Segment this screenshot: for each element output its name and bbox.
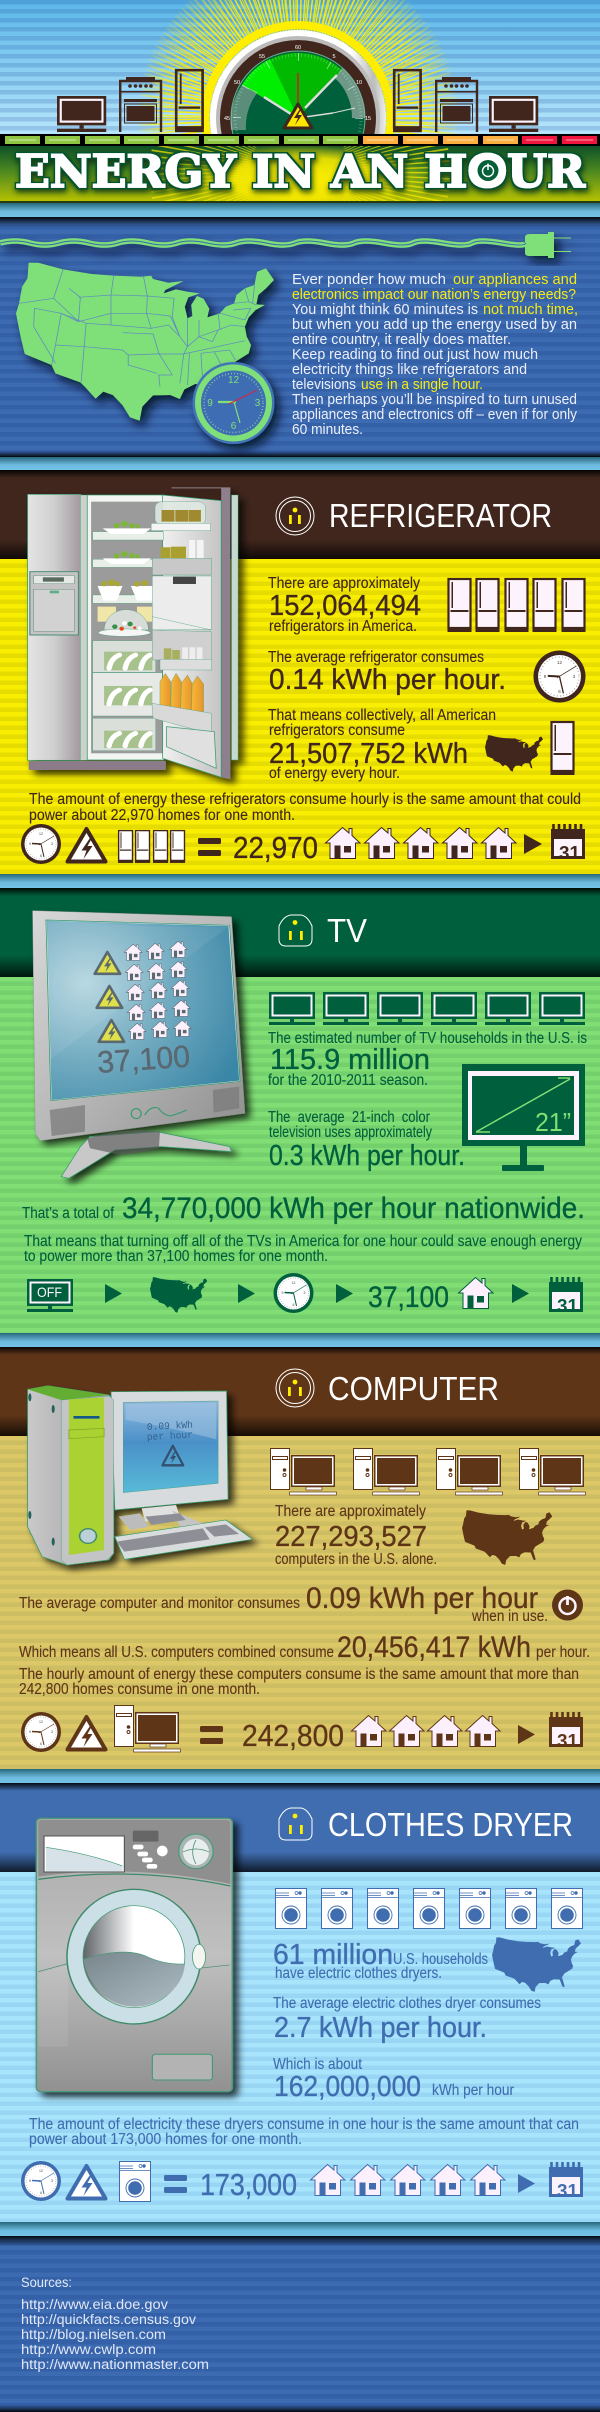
text: fridge count — [29, 575, 581, 824]
icon: clock: 9 — [544, 674, 547, 679]
LED meter bar — [0, 134, 600, 146]
icon row: refrigerators — [448, 579, 586, 632]
text: intro paragraph: entire country, it really does matter. — [292, 331, 511, 348]
heading: computer — [276, 1369, 499, 1407]
icon row: dryers — [275, 1888, 583, 1928]
gauge: 45 — [224, 116, 230, 122]
illustration: flat-screen monitor — [33, 911, 245, 1178]
icon: clock — [192, 362, 274, 444]
title banner — [0, 146, 600, 203]
icon: clock: 12 — [228, 375, 239, 386]
illustration: open refrigerator — [28, 487, 238, 779]
text: intro paragraph: appliances and electronics off – even if for only — [292, 406, 577, 423]
text: TV stats: 115.9 million — [270, 1044, 430, 1076]
flow row: OFF — [37, 1284, 62, 1300]
equation row: 6 — [40, 2191, 42, 2195]
gauge: 50 — [234, 80, 240, 86]
text: TV stats: for the 2010-2011 season. — [268, 1072, 428, 1089]
text: sources: http://www.cwlp.com — [21, 2342, 156, 2357]
text: dryer stats: power about 173,000 homes for one month. — [29, 2131, 302, 2148]
icon: outlet — [276, 497, 314, 535]
text: fridge count: power about 22,970 homes for one month. — [29, 807, 295, 824]
divider gap — [0, 2222, 600, 2236]
text: computer stats: 0.09 kWh per hour — [306, 1582, 538, 1615]
text: sources: Sources: — [21, 2275, 72, 2290]
panel: refrigerator — [0, 470, 600, 874]
text: computer stats: when in use. — [471, 1608, 548, 1625]
text: fridge count: 152,064,494 — [269, 590, 421, 622]
text: computer stats: The average computer and monitor consumes — [19, 1595, 300, 1612]
flow row: 37,100 — [368, 1281, 449, 1314]
text: intro paragraph: electronics impact our nation’s energy needs? — [292, 286, 576, 303]
text: sources: http://blog.nielsen.com — [21, 2327, 166, 2342]
icon: power button — [552, 1590, 583, 1620]
panel: TV — [0, 888, 600, 1333]
equation row: 12 — [39, 2169, 43, 2173]
text: dryer stats: have electric clothes dryers. — [275, 1965, 442, 1982]
panel: clothes dryer — [0, 1783, 600, 2222]
divider gap — [0, 457, 600, 470]
flow row: 3 — [304, 1291, 306, 1295]
icon: power cord and plug — [0, 232, 571, 258]
text: fridge count: That means collectively, all American — [268, 707, 496, 724]
text: TV stats: to power more than 37,100 homes for one month. — [24, 1248, 328, 1265]
flow row: 6 — [293, 1303, 295, 1307]
screen caption — [147, 1420, 193, 1444]
text: intro paragraph: electricity things like refrigerators and — [292, 361, 527, 378]
text: sources: http://www.nationmaster.com — [21, 2357, 209, 2372]
text: intro paragraph: but when you add up the energy used by an — [292, 316, 577, 333]
icon: right TV — [489, 96, 538, 132]
text: dryer stats: Which is about — [273, 2056, 363, 2073]
equation row: 6 — [40, 1742, 42, 1746]
icon: right fridge — [393, 70, 422, 132]
map: United States — [16, 263, 274, 421]
gauge: 5 — [332, 54, 336, 60]
icon: clock: 12 — [557, 660, 562, 665]
heading: refrigerator: REFRIGERATOR — [329, 497, 552, 534]
icon: screen warning — [162, 1446, 183, 1465]
icon: refrigerator — [550, 722, 574, 775]
icon: 21-inch TV — [462, 1064, 585, 1171]
text: fridge count: 0.14 kWh per hour. — [269, 664, 506, 696]
text: intro paragraph — [292, 271, 578, 438]
text: computer stats: per hour. — [536, 1644, 590, 1661]
text: TV stats: television uses approximately — [269, 1124, 432, 1141]
text: computer stats: 242,800 homes consume in one month. — [19, 1681, 260, 1698]
text: fridge count: 21,507,752 kWh — [269, 738, 468, 770]
flow row: 31 — [557, 1296, 578, 1316]
icon: left fridge — [175, 70, 204, 132]
gauge: 15 — [365, 116, 371, 122]
equation row: 6 — [40, 854, 42, 858]
text: intro paragraph: Ever ponder how much — [292, 271, 446, 288]
text: fridge count: of energy every hour. — [269, 765, 400, 782]
icon: outlet — [276, 1369, 314, 1407]
screen icons — [95, 941, 191, 1080]
text: intro paragraph: televisions — [292, 376, 356, 393]
heading: TV — [279, 912, 367, 949]
text: intro paragraph: Keep reading to find out just how much — [292, 346, 538, 363]
equation row: 12 — [39, 1720, 43, 1724]
equation row: 9 — [29, 842, 31, 846]
icon: plug outlet — [279, 1808, 312, 1840]
text: computer stats: 20,456,417 kWh — [337, 1631, 531, 1664]
flow row: 9 — [282, 1291, 284, 1295]
icon: right stove — [435, 77, 478, 132]
text: intro paragraph: You might think 60 minutes is — [292, 301, 478, 318]
equation row — [21, 1706, 583, 1753]
icon: clock: 3 — [573, 674, 576, 679]
panel: intro — [0, 217, 600, 457]
text: dryer stats: The average electric clothes dryer consumes — [273, 1995, 541, 2012]
equation row: 3 — [51, 842, 53, 846]
icon: plug outlet — [279, 915, 312, 946]
icon: clock: 6 — [231, 421, 237, 432]
flow row: 12 — [292, 1281, 295, 1285]
icon: USA map — [462, 1510, 552, 1565]
icon: gauge warning sign — [284, 104, 312, 128]
text: dryer stats: U.S. households — [393, 1951, 488, 1968]
icon: USA map — [492, 1937, 581, 1992]
text: computer stats — [19, 1503, 590, 1698]
text: intro paragraph: not much time, — [483, 301, 578, 318]
icon: USA map — [485, 735, 543, 772]
text: computer stats: computers in the U.S. alone. — [275, 1551, 437, 1568]
heading: clothes dryer: CLOTHES DRYER — [328, 1806, 573, 1843]
icon row: computers — [270, 1448, 586, 1495]
illustration: desktop computer — [28, 1386, 253, 1565]
text: dryer stats: 162,000,000 — [274, 2071, 421, 2103]
text: dryer stats: kWh per hour — [432, 2082, 514, 2099]
icon: clock: 3 — [255, 398, 261, 409]
divider gap — [0, 203, 600, 217]
divider gap — [0, 1769, 600, 1783]
title: ENERGY IN AN HOUR — [15, 145, 586, 198]
text: sources — [21, 2275, 209, 2372]
gauge: 60 — [295, 45, 301, 51]
equation row — [21, 824, 585, 865]
panel: header sky — [0, 0, 600, 134]
equation row: 31 — [559, 843, 580, 863]
equation row: 3 — [51, 1730, 53, 1734]
gauge: 55 — [259, 54, 265, 60]
icon: 21-inch TV: 21” — [535, 1107, 571, 1137]
equation row: 173,000 — [200, 2167, 297, 2202]
sun rays — [138, 0, 458, 134]
flow row — [27, 1273, 583, 1316]
text: computer stats: 227,293,527 — [275, 1521, 427, 1553]
screen icons: 37,100 — [96, 1039, 191, 1080]
text: fridge count: There are approximately — [268, 575, 420, 592]
text: sources: http://www.eia.doe.gov — [21, 2297, 168, 2312]
heading: refrigerator — [276, 497, 552, 535]
text: fridge count: refrigerators consume — [269, 722, 405, 739]
equation row: 31 — [557, 2181, 578, 2201]
equation row: 3 — [51, 2179, 53, 2183]
equation row: 22,970 — [233, 830, 318, 865]
illustration: clothes dryer — [36, 1818, 232, 2092]
divider gap — [0, 874, 600, 888]
text: dryer stats: 2.7 kWh per hour. — [274, 2012, 487, 2044]
screen caption: per hour — [147, 1430, 193, 1444]
icon: power button in O — [471, 154, 505, 188]
equation row: 242,800 — [242, 1718, 344, 1753]
text: computer stats: There are approximately — [275, 1503, 426, 1520]
equation row: 31 — [557, 1731, 578, 1751]
icon: clock — [534, 650, 586, 702]
icon: left TV — [57, 96, 106, 132]
equation row: 9 — [29, 2179, 31, 2183]
text: dryer stats: 61 million — [273, 1939, 393, 1971]
text: intro paragraph: 60 minutes. — [292, 421, 363, 438]
icon row: TVs — [269, 992, 585, 1025]
text: sources: http://quickfacts.census.gov — [21, 2312, 196, 2327]
heading: TV: TV — [327, 912, 367, 949]
gauge: 10 — [356, 80, 362, 86]
equation row: 12 — [39, 832, 43, 836]
text: dryer stats — [29, 1939, 579, 2148]
panel: computer — [0, 1347, 600, 1769]
text: intro paragraph: use in a single hour. — [361, 376, 483, 393]
text: fridge count: refrigerators in America. — [269, 618, 417, 635]
icon: clock: 6 — [558, 689, 561, 694]
screen caption: 0.09 kWh — [147, 1420, 193, 1434]
equation row — [21, 2161, 583, 2202]
text: intro paragraph: Then perhaps you’ll be inspired to turn unused — [292, 391, 577, 408]
text: intro paragraph: our appliances and — [453, 271, 577, 288]
text: fridge count: The average refrigerator consumes — [268, 649, 484, 666]
icon: clock: 9 — [207, 398, 213, 409]
heading: computer: COMPUTER — [328, 1370, 499, 1407]
panel: sources footer — [0, 2236, 600, 2412]
text: TV stats — [22, 1030, 587, 1265]
text: TV stats: That’s a total of — [22, 1205, 115, 1222]
text: computer stats: Which means all U.S. computers combined consume — [19, 1644, 334, 1661]
gauge — [210, 30, 386, 134]
text: TV stats: 0.3 kWh per hour. — [269, 1140, 465, 1172]
divider gap — [0, 1333, 600, 1347]
equation row: 9 — [29, 1730, 31, 1734]
icon: left stove — [119, 77, 162, 132]
text: TV stats: The average 21-inch color — [268, 1109, 430, 1126]
